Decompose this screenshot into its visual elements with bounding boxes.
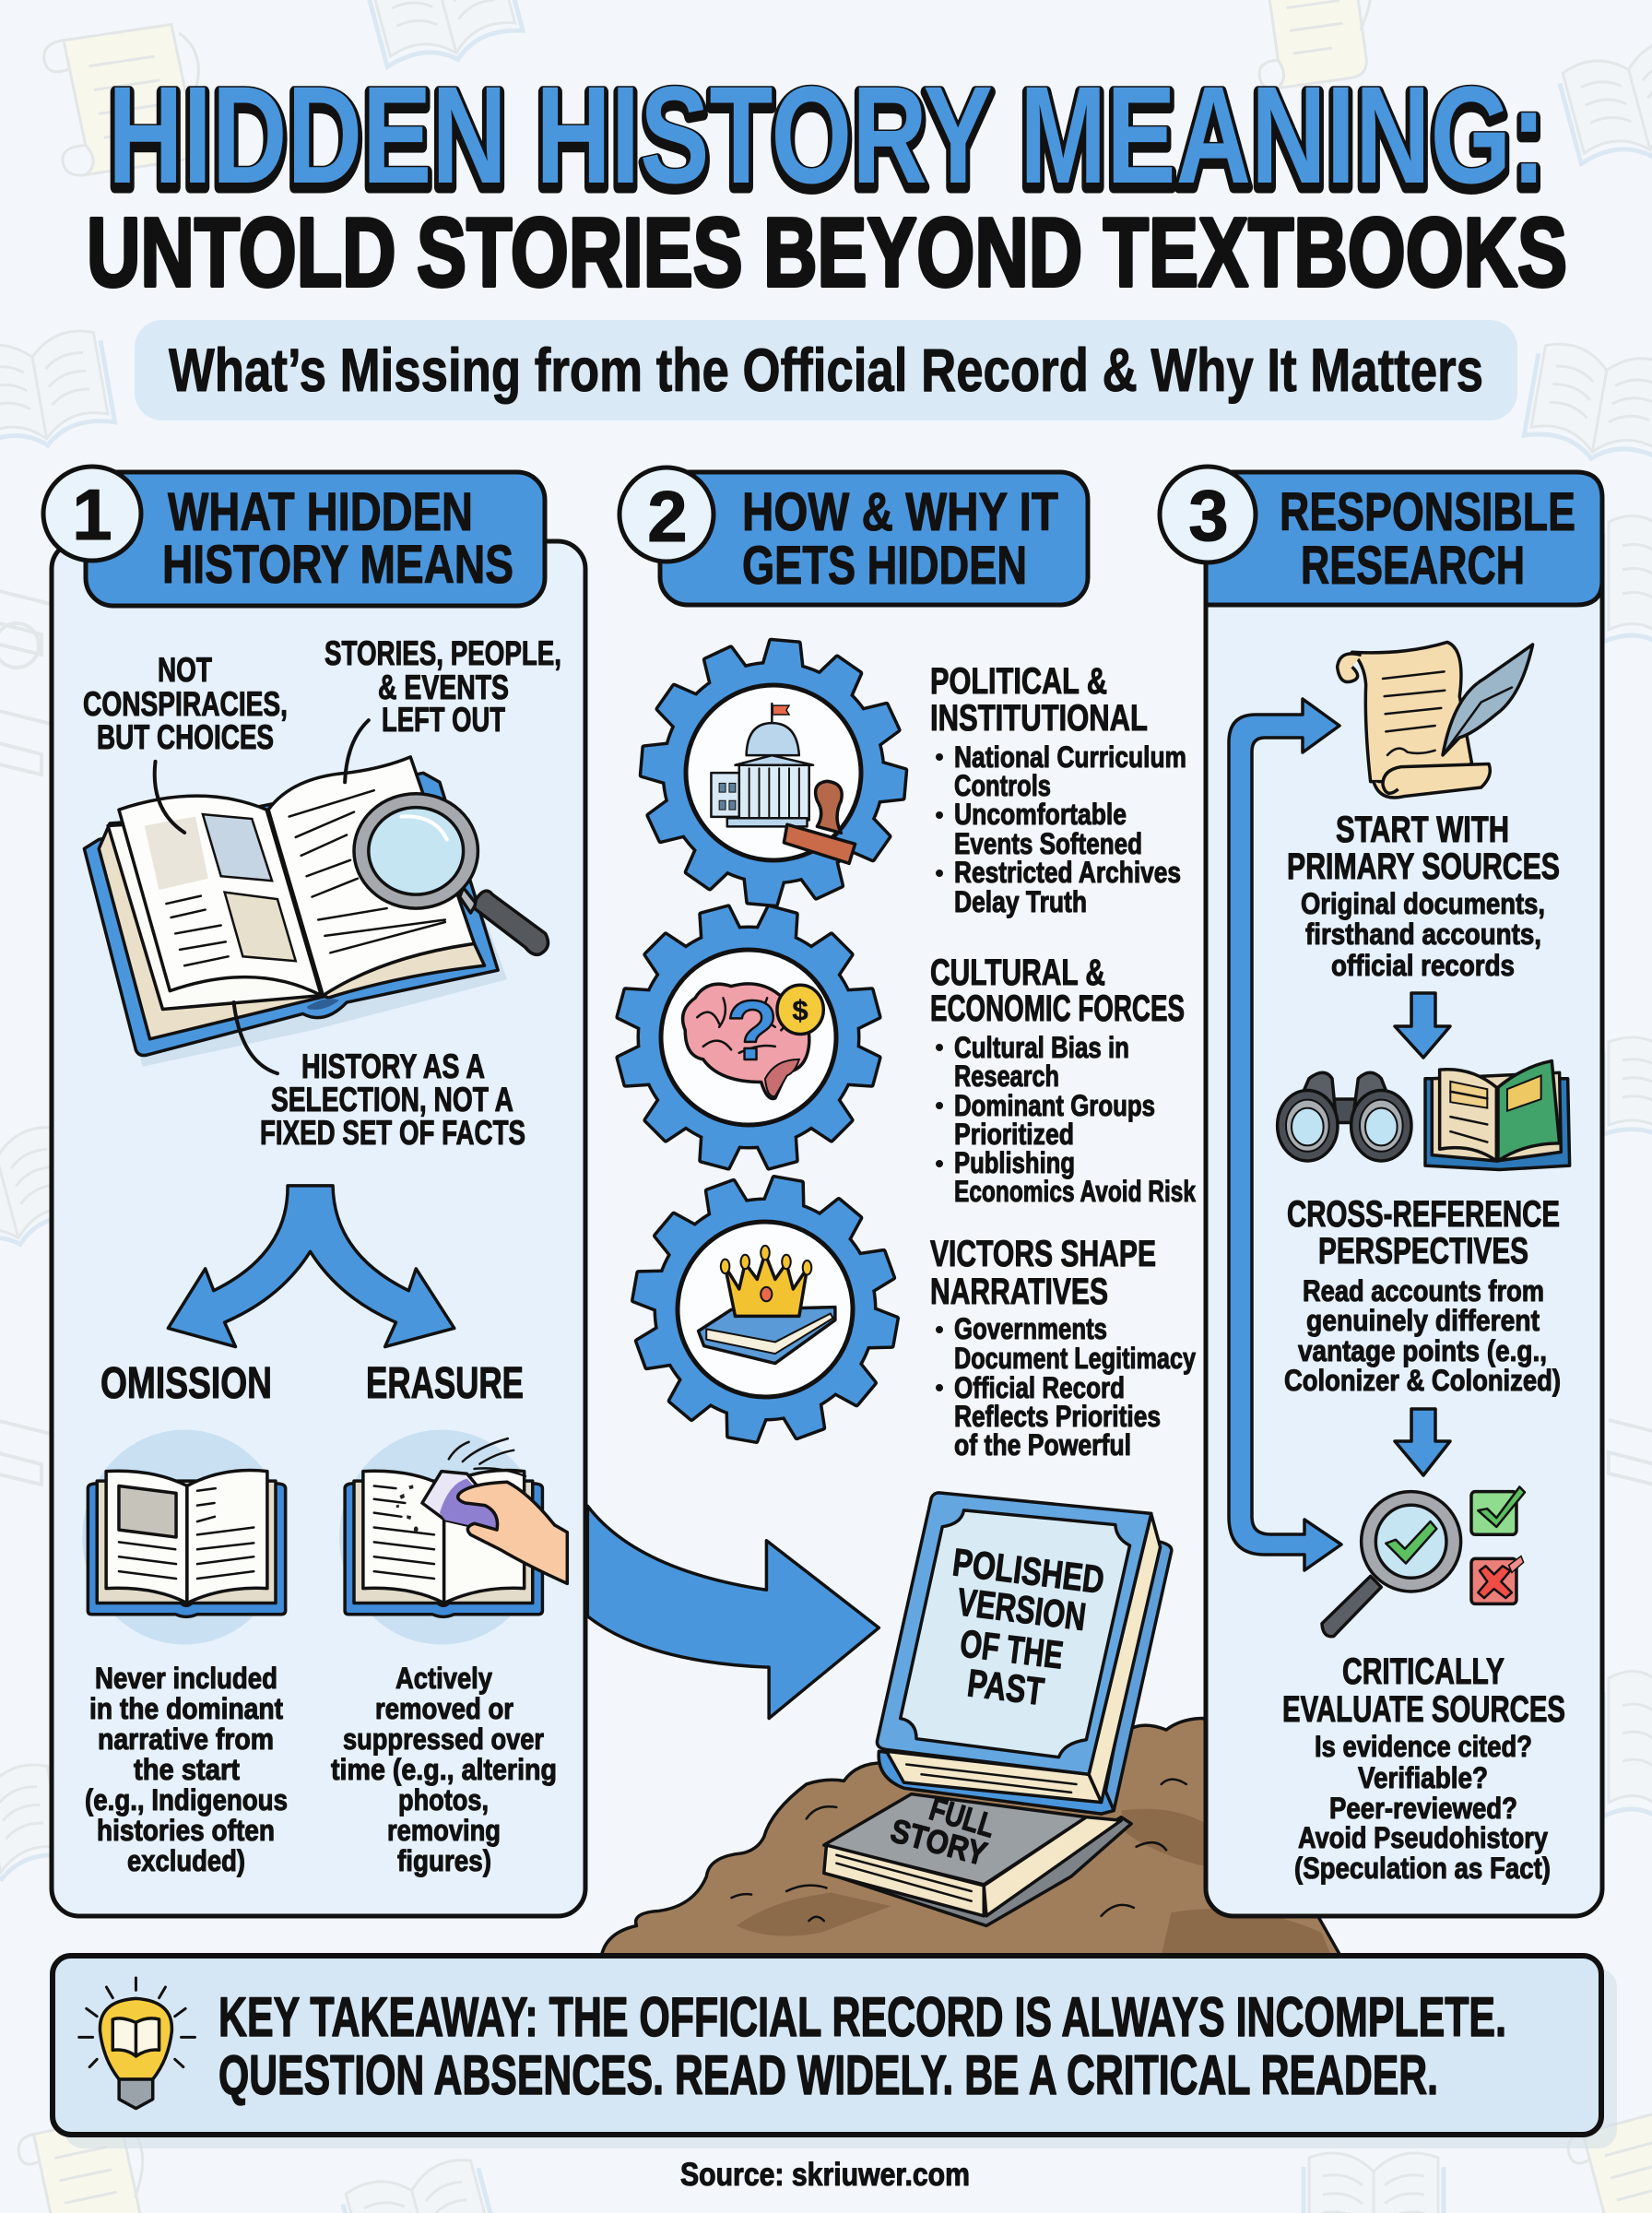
callout: history as a selection: SELECTION, NOT A (271, 1081, 513, 1118)
text block: cultural and economic: ECONOMIC FORCES (930, 988, 1185, 1029)
text: cross-reference perspectives: CROSS-REFERENCE (1287, 1194, 1560, 1235)
number badge 1: 1 (72, 474, 112, 555)
text: omission description: (e.g., Indigenous (85, 1783, 288, 1817)
text: erasure description: removed or (375, 1692, 513, 1725)
text: omission description (85, 1662, 288, 1877)
callout: not conspiracies: BUT CHOICES (97, 718, 274, 756)
text: critically evaluate sources (1282, 1651, 1565, 1885)
text: critically evaluate sources: Verifiable? (1358, 1761, 1488, 1794)
icon: omission book (82, 1430, 287, 1645)
callout: stories people events: STORIES, PEOPLE, (324, 634, 561, 672)
polished textbook: OF THE (958, 1621, 1066, 1677)
text: start with primary sources (1287, 810, 1560, 982)
header title 2: GETS HIDDEN (742, 536, 1027, 596)
text block: cultural and economic: Cultural Bias in (954, 1031, 1129, 1064)
text: omission description: histories often (97, 1814, 275, 1847)
text: omission description: in the dominant (89, 1692, 283, 1725)
text block: political and institutional: Delay Truth (954, 885, 1087, 918)
text: erasure description: figures) (397, 1844, 491, 1877)
number badge 2: 2 (647, 476, 688, 557)
text block: cultural and economic: CULTURAL & (930, 953, 1105, 993)
text: critically evaluate sources: Peer-reviewed? (1329, 1792, 1517, 1825)
arrow: down 1 (1395, 993, 1450, 1058)
header banner 1 (86, 472, 545, 606)
source line: Source: skriuwer.com (680, 2157, 970, 2193)
gear: cultural and economic forces: $ (792, 994, 808, 1026)
text block: cultural and economic: Economics Avoid Risk (954, 1175, 1196, 1208)
header title 3: RESPONSIBLE (1280, 482, 1575, 542)
polished textbook: PAST (965, 1661, 1046, 1713)
polished textbook (877, 1493, 1172, 1814)
callout: history as a selection: HISTORY AS A (301, 1047, 485, 1085)
text block: political and institutional: Controls (954, 769, 1051, 802)
callout: history as a selection: FIXED SET OF FACTS (260, 1114, 525, 1152)
icon: open book with green page (1425, 1061, 1570, 1170)
header title 2: HOW & WHY IT (742, 482, 1058, 542)
text block: political and institutional: Events Softened (954, 827, 1142, 860)
gear: cultural and economic forces (588, 877, 909, 1198)
gear: political and institutional (631, 631, 915, 915)
tagline pill (135, 320, 1517, 420)
buried book: full story: FULL (926, 1789, 1000, 1845)
icon: magnifier with check and cross boxes (1322, 1486, 1525, 1637)
panel 2: how and why it gets hidden (588, 467, 1196, 1462)
text: erasure description: time (e.g., altering (331, 1753, 557, 1786)
text: cross-reference perspectives: genuinely different (1306, 1304, 1540, 1337)
text: omission description: the start (134, 1753, 240, 1786)
header banner 2 (660, 472, 1088, 605)
panel 3: responsible research (1160, 467, 1602, 1916)
number badge 1 (43, 467, 141, 561)
text block: victors shape narratives: Reflects Priorities (954, 1400, 1161, 1433)
number badge 3 (1160, 467, 1256, 562)
arrow: from erasure to polished version (587, 1506, 879, 1719)
callout: not conspiracies: NOT (158, 651, 212, 689)
text: omission description: excluded) (127, 1844, 245, 1877)
number badge 2 (620, 467, 714, 562)
text block: victors shape narratives: Document Legitimacy (954, 1342, 1196, 1375)
text: cross-reference perspectives: vantage points (e.g., (1298, 1334, 1547, 1367)
icon: light bulb with book (79, 1978, 195, 2109)
text block: political and institutional: National Curriculum (954, 740, 1186, 774)
arrow: split into omission and erasure (168, 1186, 454, 1347)
panel 1: what hidden history means (43, 467, 585, 1916)
header title 3: RESEARCH (1301, 536, 1525, 596)
header title 2 (742, 482, 1058, 596)
text block: political and institutional: Restricted Archives (954, 856, 1181, 889)
text: start with primary sources: official records (1331, 949, 1515, 982)
text block: cultural and economic: Research (954, 1059, 1059, 1093)
number badge 3: 3 (1188, 475, 1229, 556)
polished textbook: VERSION (955, 1580, 1089, 1639)
text: erasure description: suppressed over (343, 1722, 544, 1756)
text: start with primary sources: START WITH (1336, 810, 1509, 850)
text: start with primary sources: firsthand accounts, (1305, 917, 1541, 951)
icon: binoculars (1278, 1072, 1411, 1161)
callout: not conspiracies (83, 651, 288, 756)
heading: erasure: ERASURE (366, 1359, 524, 1408)
arrow: loop back bracket (1229, 699, 1341, 1570)
key takeaway box (53, 1956, 1617, 2148)
buried book: full story (824, 1789, 1131, 1926)
header title 3 (1280, 482, 1575, 596)
text: cross-reference perspectives (1284, 1194, 1561, 1397)
callout: not conspiracies: CONSPIRACIES, (83, 685, 288, 723)
text block: victors shape narratives: Governments (954, 1312, 1107, 1345)
icon: scroll and quill (1338, 642, 1533, 798)
text: critically evaluate sources: Is evidence cited? (1315, 1730, 1532, 1763)
buried book: full story: STORY (887, 1811, 991, 1873)
text: erasure description (331, 1662, 557, 1877)
text: start with primary sources: Original documents, (1301, 887, 1545, 920)
text: erasure description: removing (387, 1814, 501, 1847)
dirt mound (602, 1719, 1341, 1957)
text block: victors shape narratives: VICTORS SHAPE (930, 1234, 1156, 1274)
text: erasure description: Actively (395, 1662, 492, 1695)
icon: open book with magnifying glass (84, 720, 548, 1073)
icon: erasure book with hand (339, 1430, 567, 1645)
arrow: down 2 (1395, 1409, 1450, 1475)
header title 1: WHAT HIDDEN (168, 482, 473, 542)
text: critically evaluate sources: CRITICALLY (1342, 1651, 1504, 1692)
header title 1: HISTORY MEANS (162, 535, 513, 595)
text: cross-reference perspectives: Colonizer & Colonized) (1284, 1364, 1561, 1397)
text block: victors shape narratives: Official Record (954, 1371, 1125, 1404)
text: cross-reference perspectives: PERSPECTIVES (1318, 1231, 1528, 1272)
text: erasure description: photos, (398, 1783, 489, 1817)
text block: political and institutional (930, 661, 1186, 918)
text block: cultural and economic (930, 953, 1196, 1208)
callout: stories people events (324, 634, 561, 739)
text block: cultural and economic: Publishing (954, 1146, 1075, 1179)
text block: political and institutional: POLITICAL & (930, 661, 1107, 702)
header banner 3 (1206, 472, 1602, 605)
text block: cultural and economic: Prioritized (954, 1118, 1074, 1151)
text: omission description: narrative from (98, 1722, 274, 1756)
text block: victors shape narratives: NARRATIVES (930, 1272, 1108, 1312)
text block: cultural and economic: Dominant Groups (954, 1089, 1155, 1122)
text block: victors shape narratives (930, 1234, 1196, 1462)
callout: stories people events: LEFT OUT (382, 701, 505, 739)
heading: omission: OMISSION (100, 1359, 272, 1408)
gear: cultural and economic forces: ? (726, 984, 778, 1078)
text: critically evaluate sources: Avoid Pseudohistory (1298, 1821, 1548, 1854)
callout: history as a selection (260, 1047, 525, 1152)
header title 1 (162, 482, 513, 595)
text block: political and institutional: INSTITUTIONAL (930, 698, 1148, 739)
text: start with primary sources: PRIMARY SOURCES (1287, 846, 1560, 887)
text: critically evaluate sources: (Speculation as Fact) (1294, 1852, 1551, 1885)
text: omission description: Never included (95, 1662, 277, 1695)
key takeaway text (218, 1986, 1506, 2106)
polished textbook: POLISHED (950, 1540, 1106, 1602)
text block: political and institutional: Uncomfortable (954, 798, 1127, 831)
text block: victors shape narratives: of the Powerful (954, 1428, 1131, 1462)
callout: stories people events: & EVENTS (378, 669, 509, 706)
gear: victors shape narratives (613, 1157, 917, 1462)
text: cross-reference perspectives: Read accounts from (1303, 1274, 1544, 1308)
